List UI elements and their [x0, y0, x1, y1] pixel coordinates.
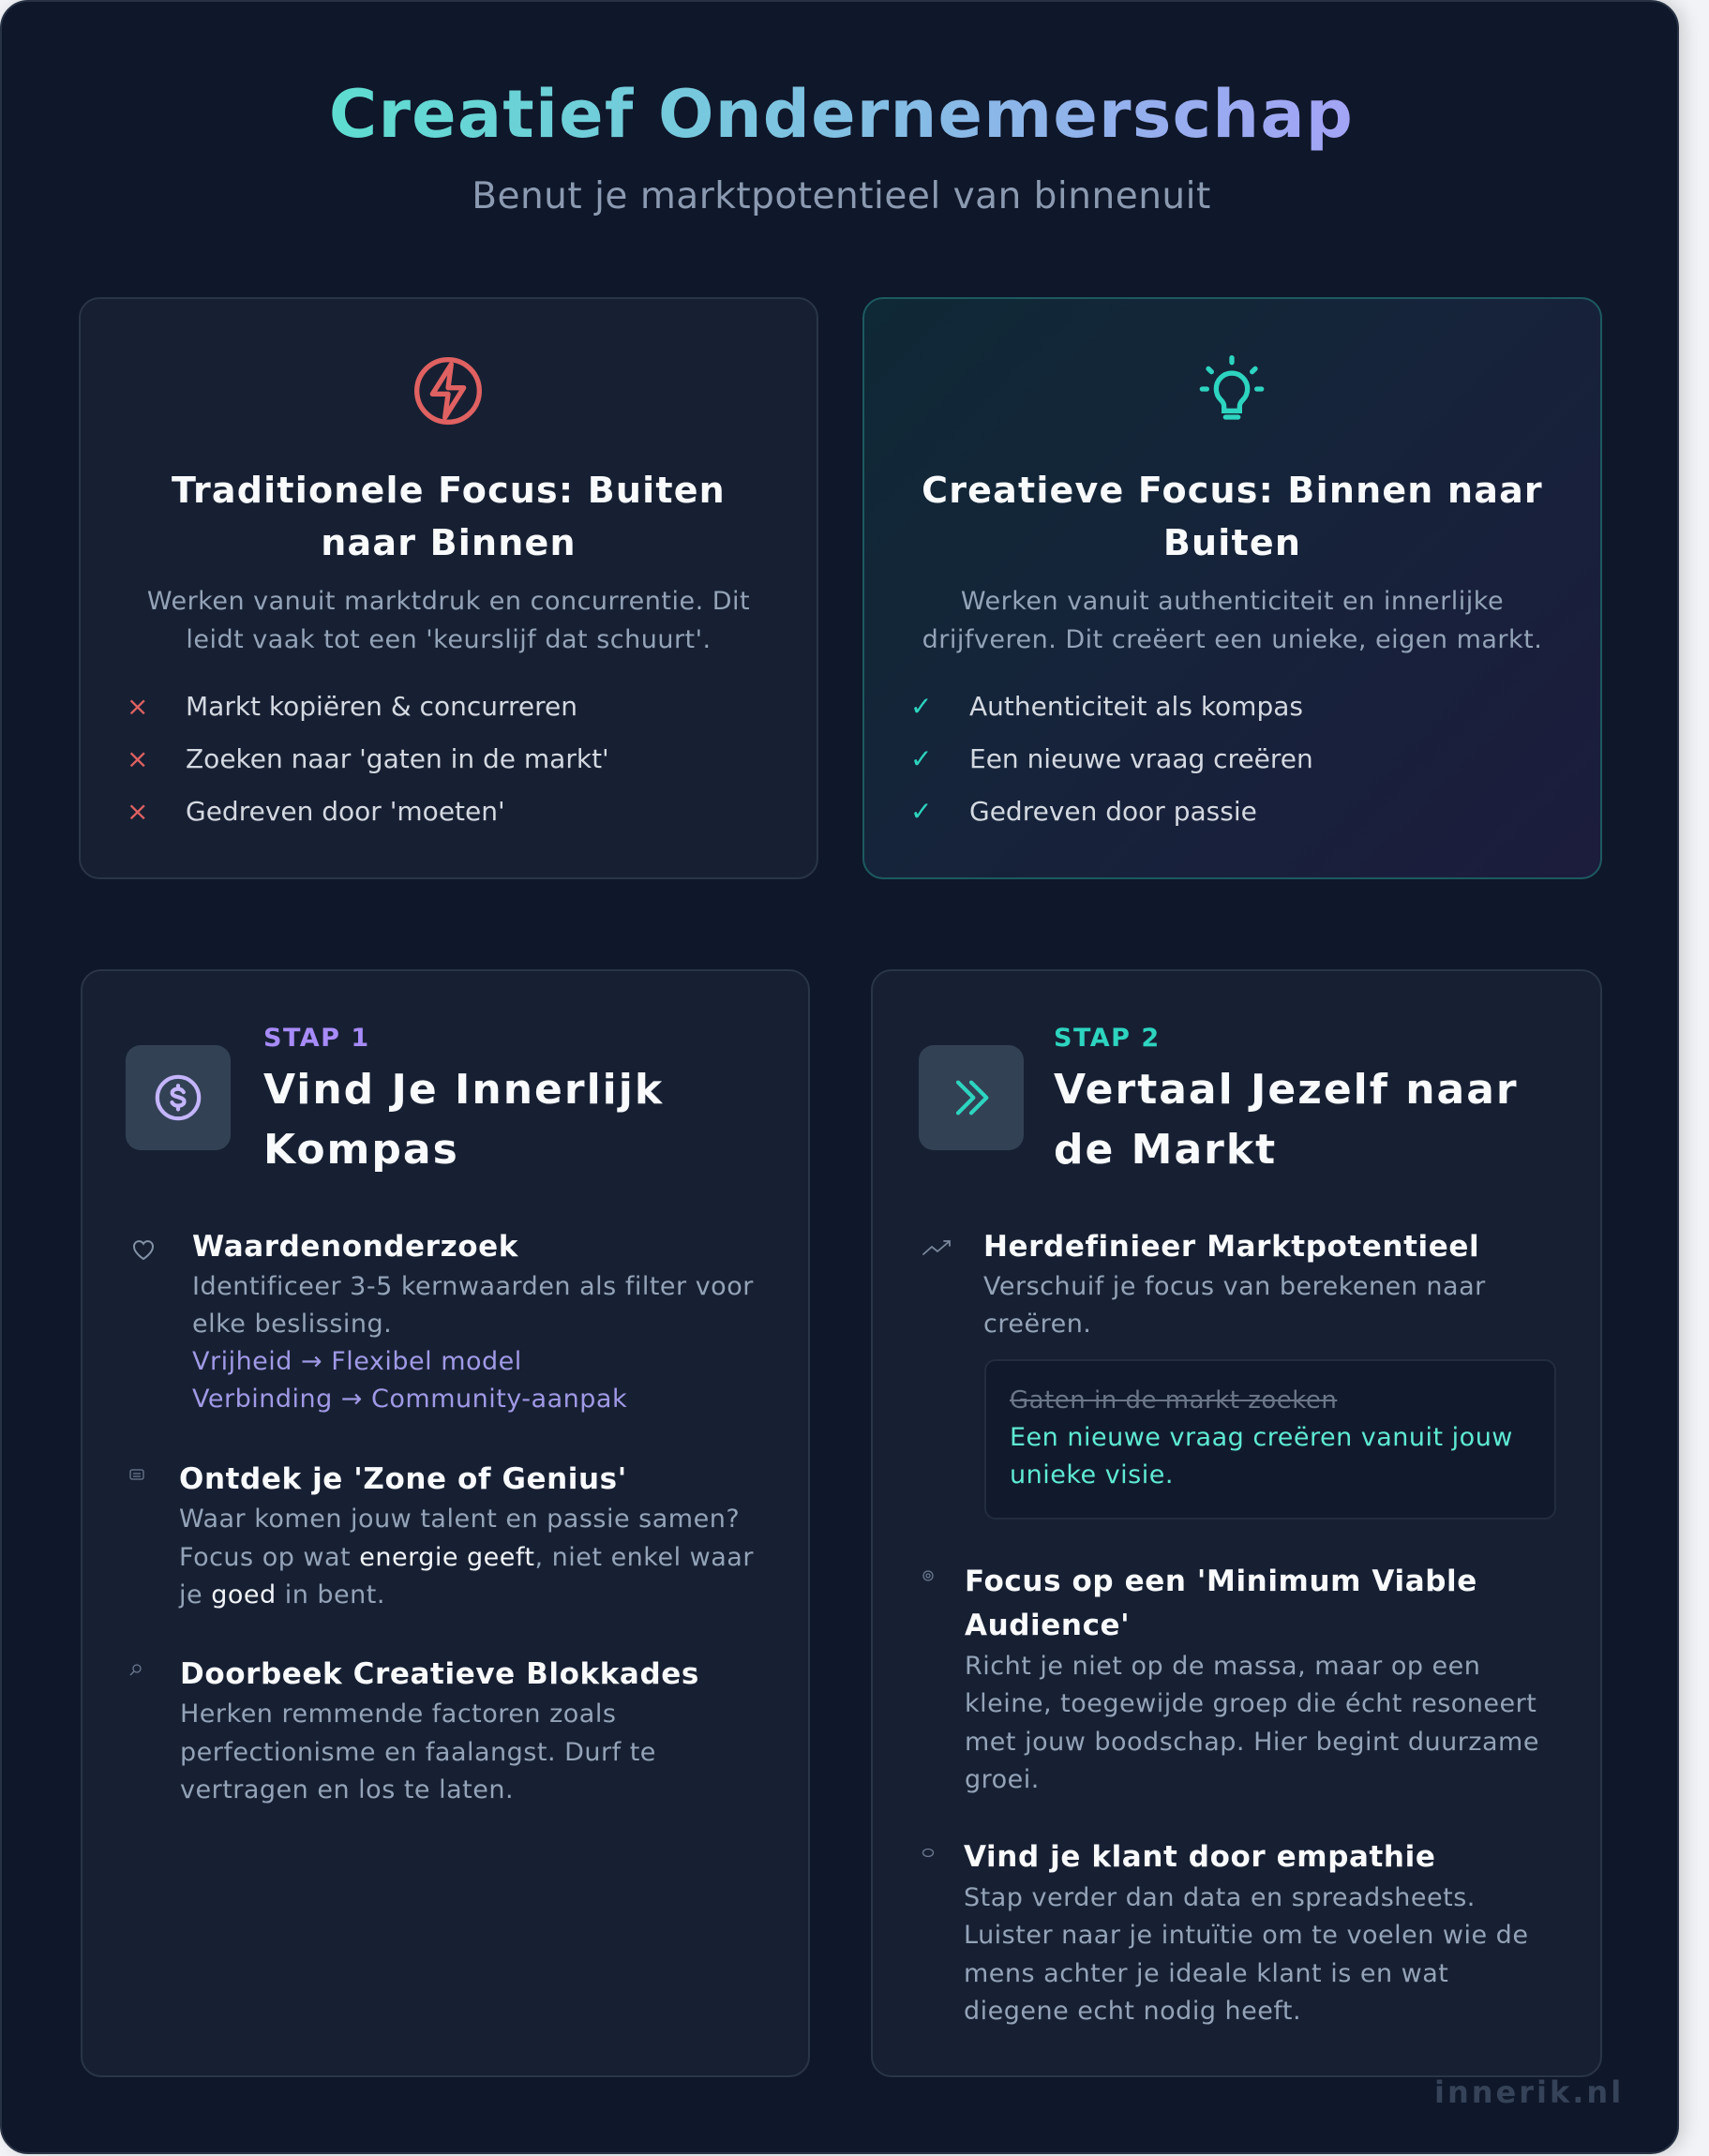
callout: reframe box: unieke visie.	[1010, 1460, 1174, 1490]
list: Zoeken naar 'gaten in de markt'	[186, 743, 609, 774]
list: ×	[127, 796, 148, 827]
heading: naar Binnen	[321, 522, 577, 563]
panel: step 1: Focus op wat energie geeft, niet enkel waar	[179, 1543, 754, 1571]
panel: step 2: Luister naar je intuïtie om te voelen wie de	[964, 1921, 1528, 1950]
list: ×	[127, 691, 148, 722]
panel: step 1: elke beslissing.	[192, 1310, 392, 1339]
panel: step 1: Doorbeek Creatieve Blokkades	[180, 1657, 699, 1691]
callout: reframe box	[984, 1359, 1556, 1520]
panel: step 1: vertragen en los te laten.	[180, 1775, 514, 1804]
panel: step 1: Verbinding → Community-aanpak	[192, 1385, 627, 1414]
item: blokkades	[129, 1657, 699, 1804]
panel: step 1: je goed in bent.	[179, 1580, 385, 1610]
callout: reframe box: Gaten in de markt zoeken	[1010, 1386, 1337, 1415]
item: empathie	[922, 1840, 1528, 2026]
step title: de Markt	[1054, 1126, 1277, 1174]
description: drijfveren. Dit creëert een unieke, eigen markt.	[922, 625, 1542, 654]
list: ✓	[910, 691, 932, 722]
panel: step 1: Waardenonderzoek	[192, 1230, 518, 1264]
list	[910, 691, 1313, 827]
heading: Traditionele Focus: Buiten	[172, 470, 726, 511]
panel: step 2: met jouw boodschap. Hier begint duurzame	[965, 1728, 1539, 1757]
description: Werken vanuit marktdruk en concurrentie. Dit	[147, 587, 750, 616]
item: zone of genius	[129, 1462, 754, 1610]
panel: step 2: groei.	[965, 1765, 1040, 1794]
icon: coin box	[126, 1045, 231, 1150]
panel: step 2: Herdefinieer Marktpotentieel	[983, 1230, 1479, 1264]
panel: step 2: kleine, toegewijde groep die écht resoneert	[965, 1689, 1537, 1718]
list: Authenticiteit als kompas	[969, 691, 1303, 722]
list: ✓	[910, 743, 932, 774]
list: Gedreven door passie	[969, 796, 1257, 827]
step label: STAP 2	[1054, 1024, 1161, 1053]
step title	[263, 1066, 664, 1174]
icon: light bulb	[1200, 355, 1264, 420]
panel: step 2: Stap verder dan data en spreadsheets.	[964, 1883, 1476, 1912]
subtitle: Benut je marktpotentieel van binnenuit	[472, 175, 1211, 217]
icon: trend	[922, 1240, 951, 1255]
step label: STAP 1	[263, 1024, 370, 1053]
list	[127, 691, 609, 827]
description: leidt vaak tot een 'keurslijf dat schuurt'.	[186, 625, 712, 654]
step title: Kompas	[263, 1126, 459, 1174]
panel: step 1: Ontdek je 'Zone of Genius'	[179, 1462, 627, 1496]
panel: step 1: Waar komen jouw talent en passie samen?	[179, 1505, 740, 1534]
icon: small card	[129, 1469, 144, 1480]
panel: step 2: Audience'	[965, 1609, 1130, 1642]
panel: step 1: Identificeer 3-5 kernwaarden als filter voor	[192, 1272, 754, 1301]
panel: step 1	[81, 969, 810, 2077]
icon: chevrons box	[919, 1045, 1024, 1150]
list: Een nieuwe vraag creëren	[969, 743, 1313, 774]
step title: Vind Je Innerlijk	[263, 1066, 664, 1114]
panel: traditional focus	[79, 297, 818, 879]
callout: reframe box: Een nieuwe vraag creëren vanuit jouw	[1010, 1423, 1513, 1452]
panel: step 2: creëren.	[983, 1310, 1091, 1339]
heading: Buiten	[1163, 522, 1301, 563]
panel: step 1: perfectionisme en faalangst. Durf te	[180, 1738, 656, 1766]
step title: Vertaal Jezelf naar	[1054, 1066, 1519, 1114]
icon: magnifier	[129, 1664, 142, 1676]
icon: lightning circle	[414, 357, 482, 425]
icon: speech bubble	[922, 1849, 934, 1858]
item: minimum viable audience	[922, 1565, 1539, 1794]
panel: step 2: Vind je klant door empathie	[964, 1840, 1435, 1874]
list: ×	[127, 743, 148, 774]
description	[922, 587, 1542, 654]
item: waardenonderzoek	[133, 1230, 754, 1414]
heading: Creatieve Focus: Binnen naar	[922, 470, 1543, 511]
panel: step 2: mens achter je ideale klant is en wat	[964, 1959, 1448, 1988]
panel: step 1: Vrijheid → Flexibel model	[192, 1347, 522, 1376]
watermark: innerik.nl	[1434, 2074, 1624, 2110]
description	[147, 587, 750, 654]
panel: step 2: Focus op een 'Minimum Viable	[965, 1565, 1477, 1598]
panel: step 2: Verschuif je focus van berekenen naar	[983, 1272, 1486, 1301]
title: Creatief Ondernemerschap	[329, 76, 1354, 153]
panel: step 2: Richt je niet op de massa, maar op een	[965, 1652, 1480, 1681]
icon: small target	[922, 1570, 934, 1581]
list: ✓	[910, 796, 932, 827]
description: Werken vanuit authenticiteit en innerlijke	[961, 587, 1504, 616]
step title	[1054, 1066, 1519, 1174]
list: Gedreven door 'moeten'	[186, 796, 505, 827]
panel: step 2: diegene echt nodig heeft.	[964, 1997, 1301, 2026]
item: marktpotentieel	[922, 1230, 1486, 1339]
heading	[172, 470, 726, 563]
icon: heart	[133, 1240, 154, 1260]
panel: creative focus	[862, 297, 1602, 879]
panel: step 2	[871, 969, 1602, 2077]
panel: step 1: Herken remmende factoren zoals	[180, 1699, 616, 1729]
list: Markt kopiëren & concurreren	[186, 691, 577, 722]
heading	[922, 470, 1543, 563]
